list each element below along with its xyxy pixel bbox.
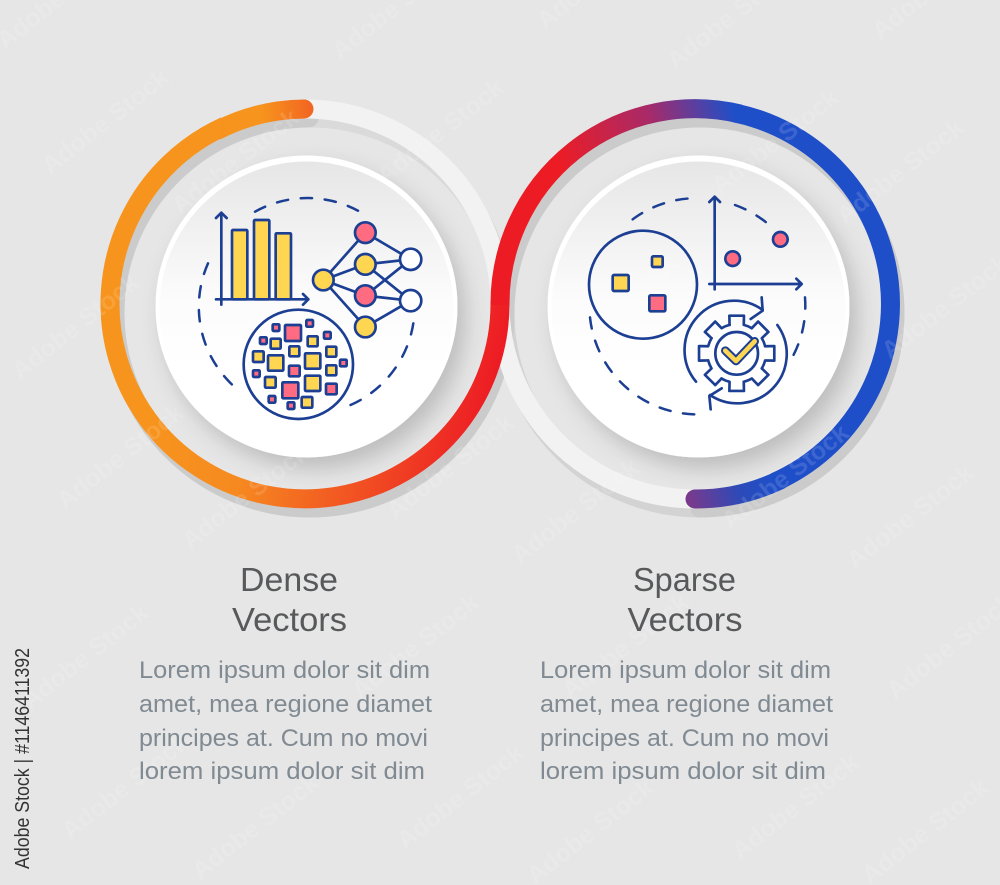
watermark: Adobe Stock bbox=[391, 739, 529, 855]
icon: dense vectors bbox=[199, 198, 421, 419]
dashed outline circle bbox=[590, 198, 805, 414]
text block: dense vectors: lorem ipsum dolor sit dim bbox=[139, 758, 425, 785]
dashed outline circle bbox=[199, 198, 413, 407]
heading: sparse vectors bbox=[628, 562, 742, 639]
watermark: Adobe Stock bbox=[176, 439, 314, 555]
text block: dense vectors: Lorem ipsum dolor sit dim bbox=[139, 657, 430, 684]
icon: sparse vectors bbox=[589, 197, 805, 414]
watermark: Adobe Stock bbox=[51, 399, 189, 515]
watermark: Adobe Stock bbox=[706, 84, 844, 200]
watermark: Adobe Stock bbox=[6, 269, 144, 385]
circle with sparse squares bbox=[589, 231, 697, 339]
ring shadows bbox=[115, 118, 895, 508]
watermark: Adobe Stock bbox=[381, 409, 519, 525]
watermark: Adobe Stock bbox=[16, 599, 154, 715]
watermark: Adobe Stock bbox=[546, 249, 684, 365]
watermark: Adobe Stock bbox=[841, 459, 979, 575]
heading: sparse vectors: Vectors bbox=[628, 602, 742, 639]
watermark: Adobe Stock bbox=[346, 589, 484, 705]
watermark: Adobe Stock bbox=[556, 589, 694, 705]
watermark: Adobe Stock bbox=[726, 749, 864, 865]
heading: dense vectors: Vectors bbox=[232, 602, 347, 639]
watermark: Adobe Stock bbox=[716, 419, 854, 535]
gear with check mark and cycle arrows bbox=[685, 297, 787, 409]
disc: sparse vectors bbox=[548, 156, 850, 458]
stock id caption: Adobe Stock | #1146411392 bbox=[12, 648, 34, 869]
text block: dense vectors: principes at. Cum no movi bbox=[139, 725, 428, 752]
text block: dense vectors: amet, mea regione diamet bbox=[139, 691, 432, 718]
watermark: Adobe Stock bbox=[831, 114, 969, 230]
light ring segments bbox=[304, 109, 695, 499]
gradient S-shaped ring bbox=[110, 109, 890, 499]
watermark: Adobe Stock bbox=[186, 769, 324, 885]
text block: sparse vectors: Lorem ipsum dolor sit dim bbox=[540, 657, 831, 684]
heading: dense vectors bbox=[232, 562, 347, 639]
watermark: Adobe Stock bbox=[216, 239, 354, 355]
watermark: Adobe Stock bbox=[166, 104, 304, 220]
heading: dense vectors: Dense bbox=[240, 562, 338, 599]
disc: dense vectors bbox=[156, 156, 458, 458]
text block: sparse vectors bbox=[540, 657, 833, 785]
circle of dense squares bbox=[244, 310, 353, 419]
neural network bbox=[313, 222, 421, 337]
text block: sparse vectors: lorem ipsum dolor sit dim bbox=[540, 758, 826, 785]
text block: sparse vectors: principes at. Cum no movi bbox=[540, 725, 829, 752]
scatter plot bbox=[709, 197, 802, 289]
watermark: Adobe Stock bbox=[36, 64, 174, 180]
text block: dense vectors bbox=[139, 657, 432, 785]
text block: sparse vectors: amet, mea regione diamet bbox=[540, 691, 833, 718]
watermark: Adobe Stock bbox=[56, 729, 194, 845]
bar chart bbox=[216, 213, 308, 305]
heading: sparse vectors: Sparse bbox=[633, 562, 736, 599]
watermark: Adobe Stock bbox=[506, 454, 644, 570]
watermark: Adobe Stock bbox=[371, 74, 509, 190]
